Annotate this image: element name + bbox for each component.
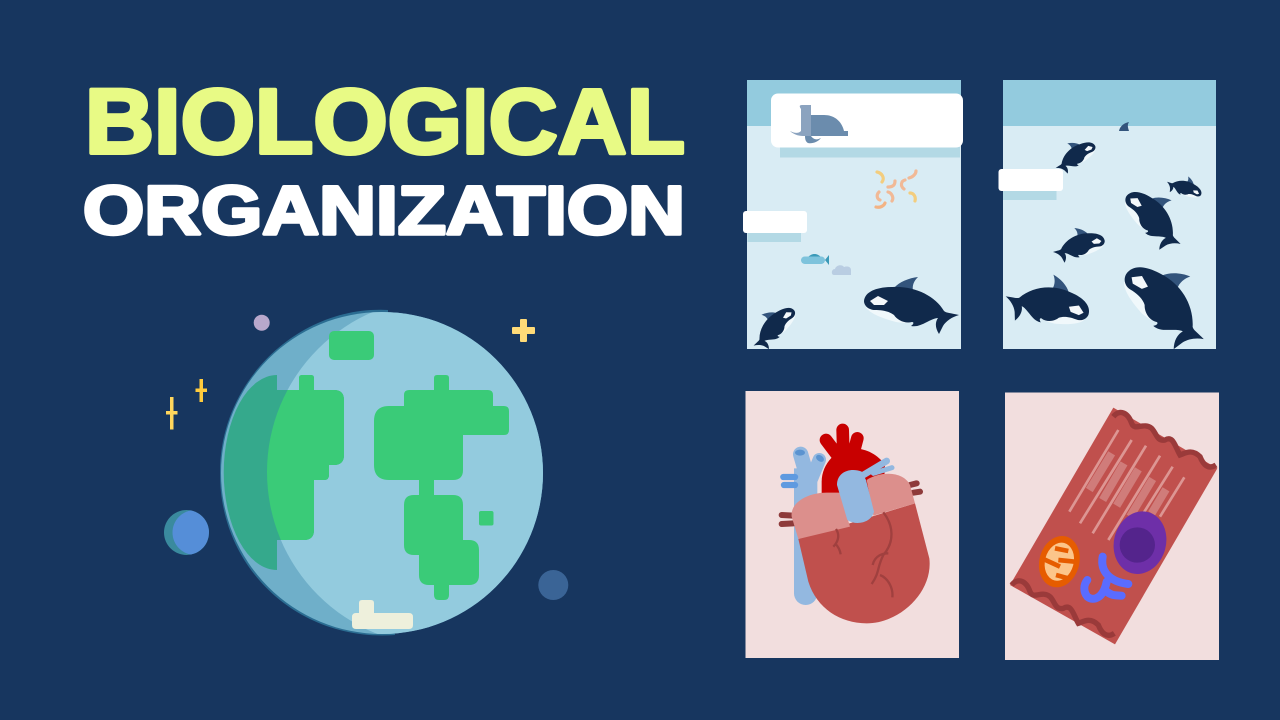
myofibril lines bbox=[1069, 430, 1184, 540]
heading: biological: BIOLOGICAL bbox=[85, 71, 685, 173]
orca top bbox=[1049, 135, 1101, 177]
orca medium right bbox=[1112, 179, 1198, 258]
icon: seal bbox=[790, 105, 848, 143]
panel: organ heart bbox=[746, 391, 959, 658]
bottom membrane bbox=[1012, 581, 1114, 635]
water bbox=[1003, 80, 1216, 349]
panel: cell bbox=[1005, 392, 1219, 660]
earth ocean lit bbox=[281, 312, 543, 634]
small island bbox=[479, 511, 494, 526]
planet: blue bbox=[164, 510, 209, 555]
shaded land bbox=[224, 375, 277, 570]
blank label bbox=[771, 94, 963, 148]
heading: organization: ORGANIZATION bbox=[83, 172, 685, 249]
right continent bbox=[374, 375, 509, 600]
orca small bbox=[742, 299, 805, 355]
star: tall sparkle bbox=[166, 397, 178, 430]
panel background bbox=[1005, 392, 1219, 660]
small label shadow bbox=[748, 232, 801, 242]
small label shadow bbox=[1003, 191, 1056, 200]
earth ocean shadow bbox=[221, 312, 543, 634]
label shadow bbox=[780, 147, 960, 158]
planet: lilac bbox=[254, 315, 270, 331]
illustration: earth bbox=[220, 310, 543, 636]
endoplasmic reticulum bbox=[1084, 557, 1128, 599]
orca large bbox=[864, 277, 959, 334]
water bbox=[747, 80, 961, 349]
aorta bbox=[822, 430, 885, 495]
icon: muscle cell bbox=[1010, 408, 1217, 644]
surface band bbox=[1003, 80, 1216, 126]
cell body bbox=[1010, 408, 1217, 644]
small blank label bbox=[743, 211, 807, 233]
nucleus bbox=[1107, 505, 1173, 580]
panel: population bbox=[998, 80, 1228, 360]
planet shadow bbox=[164, 510, 209, 555]
star: plus bbox=[512, 319, 535, 342]
left continent bbox=[262, 375, 344, 540]
left continent shaded bbox=[262, 375, 344, 540]
north island bbox=[329, 331, 374, 360]
orca small right bbox=[1163, 169, 1206, 206]
pulmonary veins bbox=[782, 483, 920, 524]
earth outer shadow ring bbox=[220, 310, 395, 635]
panel: ecosystem bbox=[742, 80, 963, 355]
orca centre bbox=[1052, 226, 1106, 263]
atria bbox=[792, 474, 915, 539]
planet lit side bbox=[172, 510, 209, 554]
myofibril bands bbox=[1089, 453, 1166, 517]
coronary vessels bbox=[833, 512, 892, 597]
orca largest bbox=[1106, 248, 1228, 360]
small blank label bbox=[998, 169, 1063, 191]
pulmonary artery bbox=[837, 461, 892, 523]
panel background bbox=[746, 391, 959, 658]
surface band bbox=[747, 80, 961, 126]
title bbox=[83, 71, 685, 249]
vena cava bbox=[783, 450, 825, 605]
icon: fish bbox=[801, 254, 829, 265]
polar ice bbox=[352, 600, 413, 629]
icon: heart bbox=[782, 430, 930, 623]
icon: krill bbox=[876, 171, 916, 207]
ventricle bbox=[798, 503, 930, 623]
orca lower left bbox=[999, 261, 1097, 345]
mitochondrion bbox=[1033, 531, 1085, 592]
star: small sparkle bbox=[196, 379, 207, 402]
top membrane bbox=[1113, 412, 1216, 467]
planet: dim blue bbox=[538, 570, 568, 600]
icon: plankton cloud bbox=[832, 265, 851, 275]
dorsal fin at surface bbox=[1119, 122, 1129, 131]
